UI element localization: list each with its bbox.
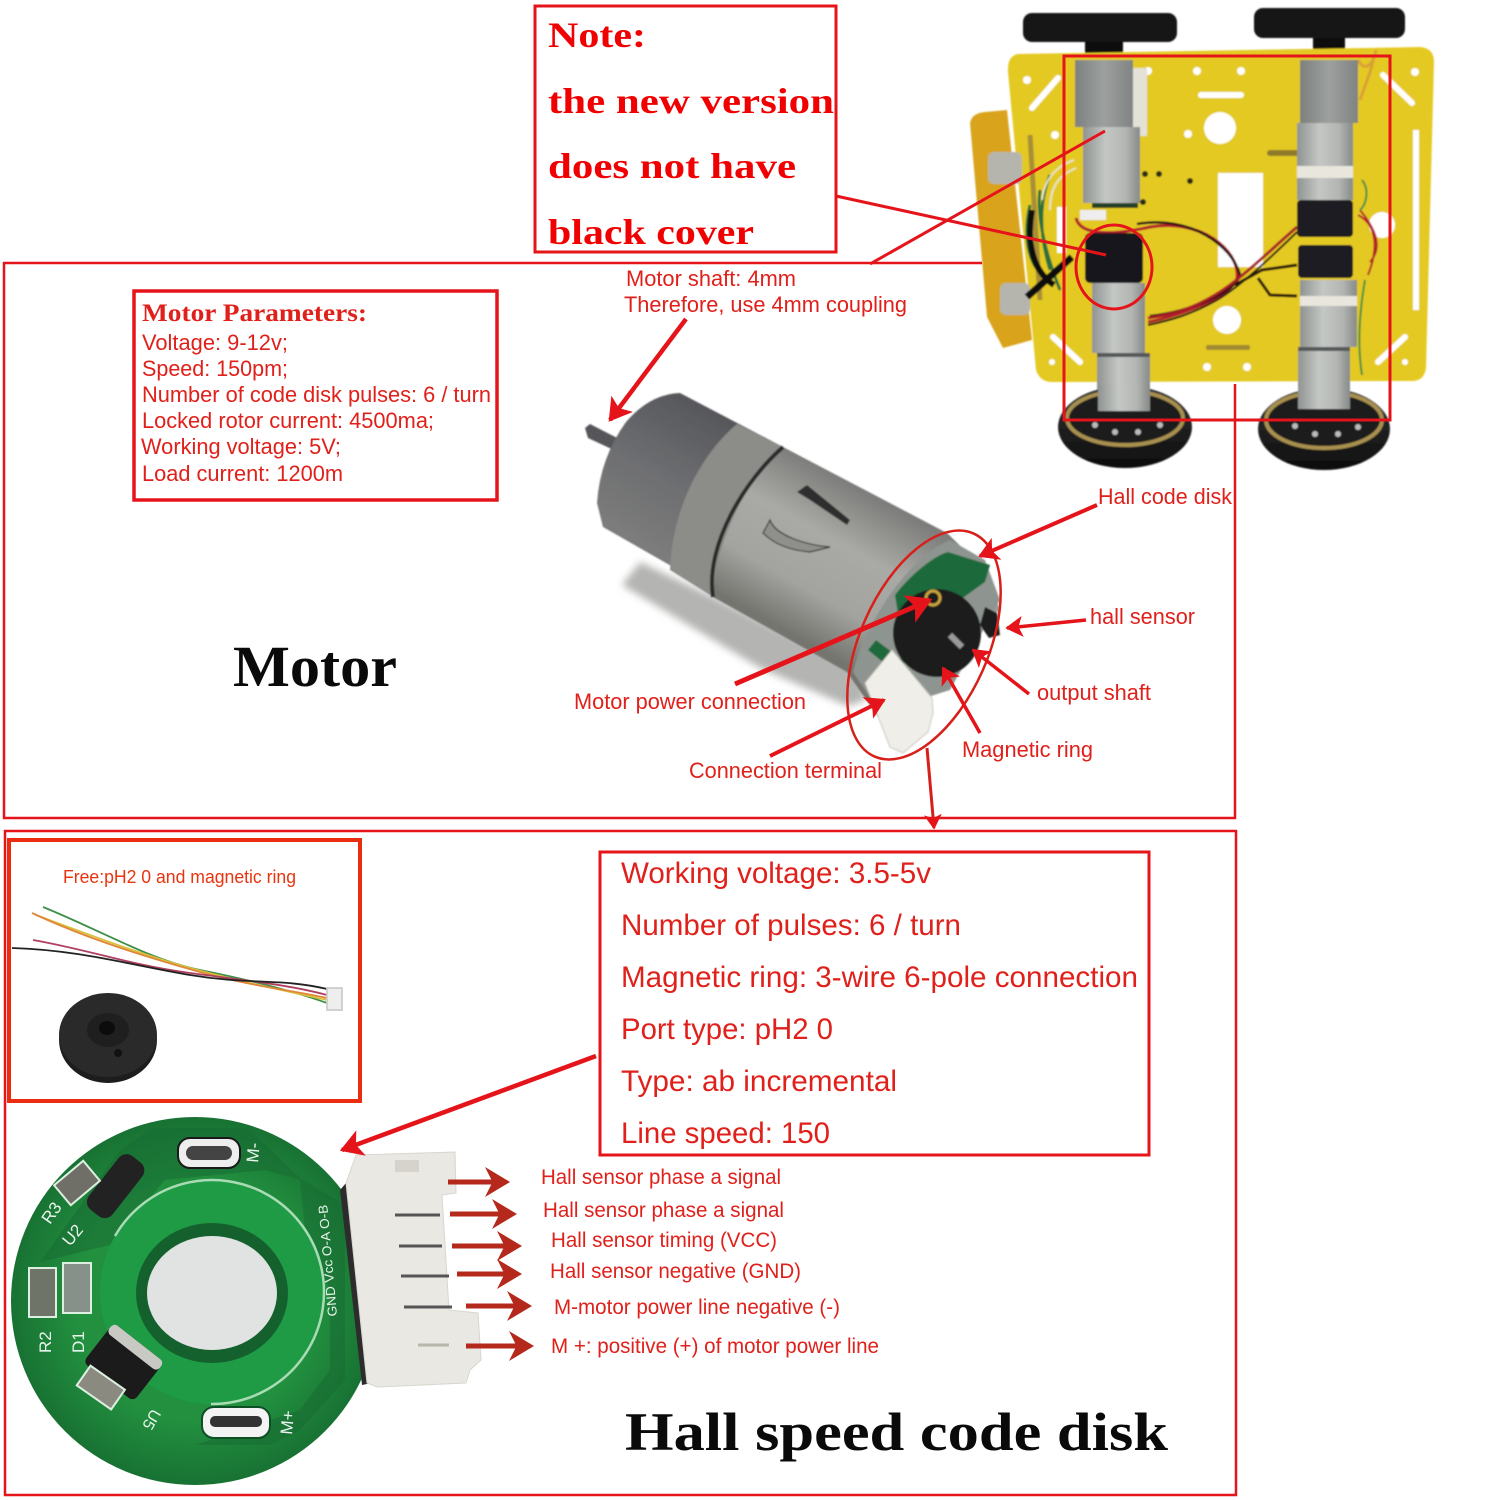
photo: hall PCB: M+ xyxy=(277,1410,298,1435)
motor parameters box: Number of code disk pulses: 6 / turn xyxy=(142,382,491,407)
specs box: Working voltage: 3.5-5v xyxy=(621,857,931,890)
specs box: Port type: pH2 0 xyxy=(621,1013,833,1046)
label: connection terminal: Connection terminal xyxy=(689,758,882,783)
pin arrows and labels: Hall sensor phase a signal xyxy=(543,1199,784,1222)
pin arrows and labels: Hall sensor phase a signal xyxy=(541,1166,781,1189)
photo: hall PCB: D1 xyxy=(69,1331,88,1353)
photo: hall PCB xyxy=(11,1117,481,1485)
specs box: Type: ab incremental xyxy=(621,1065,897,1098)
label: hall code disk xyxy=(980,484,1233,556)
motor parameters box: Voltage: 9-12v; xyxy=(142,330,288,355)
label: output shaft xyxy=(973,650,1151,705)
panel: hall speed code disk xyxy=(5,831,1236,1495)
specs box: Line speed: 150 xyxy=(621,1117,830,1150)
panel: free accessories xyxy=(9,840,360,1101)
pin arrows and labels: Hall sensor timing (VCC) xyxy=(551,1229,777,1252)
label: connection terminal xyxy=(689,700,884,783)
motor parameters box xyxy=(134,291,497,500)
label: motor shaft: Motor shaft: 4mm xyxy=(626,266,796,291)
callout line from note xyxy=(836,196,1106,255)
ring around disk xyxy=(816,508,1032,782)
photo: hall PCB: M- xyxy=(243,1142,264,1163)
note box: black cover xyxy=(548,212,754,252)
pin arrows and labels: Hall sensor negative (GND) xyxy=(550,1260,801,1283)
label: hall code disk: Hall code disk xyxy=(1098,484,1233,509)
red box around motors xyxy=(1064,56,1390,420)
connector line to motor panel xyxy=(870,131,1105,264)
label: magnetic ring: Magnetic ring xyxy=(962,737,1093,762)
label: motor shaft: Therefore, use 4mm coupling xyxy=(624,292,907,317)
photo: hall PCB: R2 xyxy=(36,1331,55,1353)
photo: hall PCB: U5 xyxy=(138,1406,163,1432)
heading: Motor: Motor xyxy=(233,634,397,699)
label: motor shaft xyxy=(610,266,907,420)
label: motor power connection xyxy=(574,600,930,714)
heading: Hall speed code disk: Hall speed code disk xyxy=(625,1402,1168,1462)
note box: the new version xyxy=(548,81,834,121)
label: hall sensor xyxy=(1007,604,1195,629)
label: magnetic ring xyxy=(943,668,1093,762)
photo: geared motor xyxy=(585,393,1000,753)
photo: hall PCB: GND Vcc O-A O-B xyxy=(315,1204,340,1317)
note box: Note: xyxy=(548,15,646,55)
label: motor power connection: Motor power connection xyxy=(574,689,806,714)
photo: hall PCB: U2 xyxy=(59,1221,87,1250)
panel: motor xyxy=(4,263,1235,818)
icon: magnetic ring xyxy=(59,993,157,1083)
note box: does not have xyxy=(548,146,796,186)
specs box xyxy=(600,852,1149,1155)
label: output shaft: output shaft xyxy=(1037,680,1151,705)
note box xyxy=(535,6,836,252)
icon: wire harness xyxy=(12,907,342,1010)
label: hall sensor: hall sensor xyxy=(1090,604,1195,629)
motor parameters box: Speed: 150pm; xyxy=(142,356,288,381)
motor parameters box: Load current: 1200m xyxy=(142,461,343,486)
pin arrows and labels: M +: positive (+) of motor power line xyxy=(551,1335,879,1358)
pin arrows and labels xyxy=(448,1166,879,1358)
motor parameters box: Working voltage: 5V; xyxy=(141,434,341,459)
arrow: down to code disk panel xyxy=(927,748,934,828)
specs box: Number of pulses: 6 / turn xyxy=(621,909,961,942)
motor parameters box: Motor Parameters: xyxy=(142,300,367,327)
pin arrows and labels: M-motor power line negative (-) xyxy=(554,1296,840,1319)
motor parameters box: Locked rotor current: 4500ma; xyxy=(142,408,434,433)
photo: hall PCB: R3 xyxy=(38,1199,66,1227)
specs box: Magnetic ring: 3-wire 6-pole connection xyxy=(621,961,1138,994)
photo: robot car chassis xyxy=(970,8,1434,470)
red circle on black cover xyxy=(1076,225,1152,309)
arrow: specs to board xyxy=(342,1056,596,1150)
panel: free accessories: Free:pH2 0 and magnetic ring xyxy=(63,866,296,887)
